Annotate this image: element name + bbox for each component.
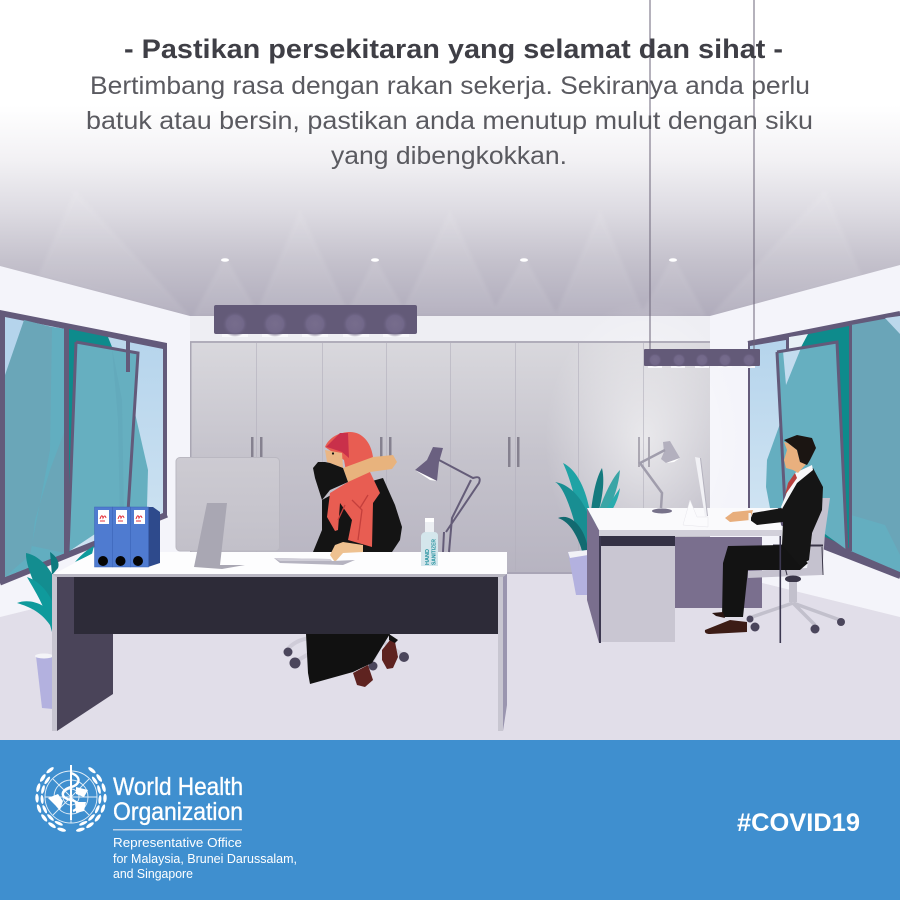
hand [725, 510, 753, 522]
open window frame [777, 342, 847, 551]
continents [48, 787, 88, 813]
eye [332, 452, 334, 455]
curtain [777, 342, 847, 550]
hand sanitizer bottle: HAND [425, 549, 431, 565]
keyboard [274, 558, 355, 565]
WHO wordmark: Representative Office [113, 835, 242, 850]
footer band [0, 740, 900, 900]
monitor right [683, 457, 708, 527]
chair [746, 498, 845, 634]
head [784, 442, 807, 473]
curtain [5, 320, 65, 577]
skirt [306, 634, 390, 684]
jacket [750, 468, 823, 566]
scarf hijab [325, 432, 380, 547]
binders [94, 507, 160, 567]
desk lamp left [415, 447, 480, 552]
open window frame [68, 342, 138, 552]
ceiling light cones [38, 190, 862, 316]
left window [0, 310, 167, 583]
desk right [587, 508, 782, 643]
WHO wordmark: Organization [113, 798, 243, 826]
sleeve elbow [313, 462, 348, 500]
text block: heading and body [86, 34, 813, 170]
WHO wordmark: for Malaysia, Brunei Darussalam, [113, 851, 297, 866]
pot [36, 655, 53, 709]
scarf inner fold [326, 433, 349, 458]
cabinet handles [251, 437, 650, 467]
back wall upper band [190, 316, 710, 346]
torso [313, 478, 402, 552]
hand on keyboard [330, 542, 363, 562]
pendant lamp right [644, 0, 760, 368]
staff and serpent [63, 765, 79, 820]
cabinets on back wall [190, 300, 745, 580]
hand sanitizer bottle [421, 518, 438, 566]
hashtag: #COVID19 [737, 809, 860, 837]
wreath left and right [35, 766, 107, 833]
leaves [17, 546, 94, 632]
WHO wordmark: World Health [113, 773, 243, 801]
left wall [0, 266, 190, 617]
forearm [343, 455, 397, 482]
desk lamp right [640, 441, 680, 514]
face [325, 450, 343, 468]
pendant lamp left [214, 100, 417, 337]
right window [748, 313, 900, 577]
WHO wordmark [113, 773, 297, 881]
body text: Bertimbang rasa dengan rakan sekerja. Sekiranya anda perlu [90, 72, 810, 100]
chair base woman [284, 638, 409, 670]
woman coughing into elbow [306, 432, 402, 687]
body text [86, 72, 813, 170]
body text: yang dibengkokkan. [331, 142, 567, 170]
desk left [52, 552, 507, 731]
plant left [17, 546, 94, 709]
man at desk [705, 435, 845, 634]
shirt and tie [781, 465, 813, 509]
shoes [353, 665, 373, 687]
scarf folds [338, 495, 368, 540]
monitor left [176, 458, 280, 569]
plant right [555, 463, 620, 595]
legs and shoes [722, 545, 808, 617]
WHO wordmark: and Singapore [113, 866, 193, 881]
heading: - Pastikan persekitaran yang selamat dan sihat - [124, 34, 783, 64]
pot [568, 550, 588, 595]
ceiling [0, 0, 900, 320]
floor skirting [190, 570, 710, 574]
body text: batuk atau bersin, pastikan anda menutup mulut dengan siku [86, 107, 813, 135]
desk right front leg [780, 536, 781, 643]
hand sanitizer bottle: SANITIZER [432, 539, 438, 565]
ceiling spotlights [221, 258, 677, 262]
icon: WHO emblem [35, 765, 107, 833]
floor [0, 570, 900, 740]
right wall [710, 265, 900, 617]
